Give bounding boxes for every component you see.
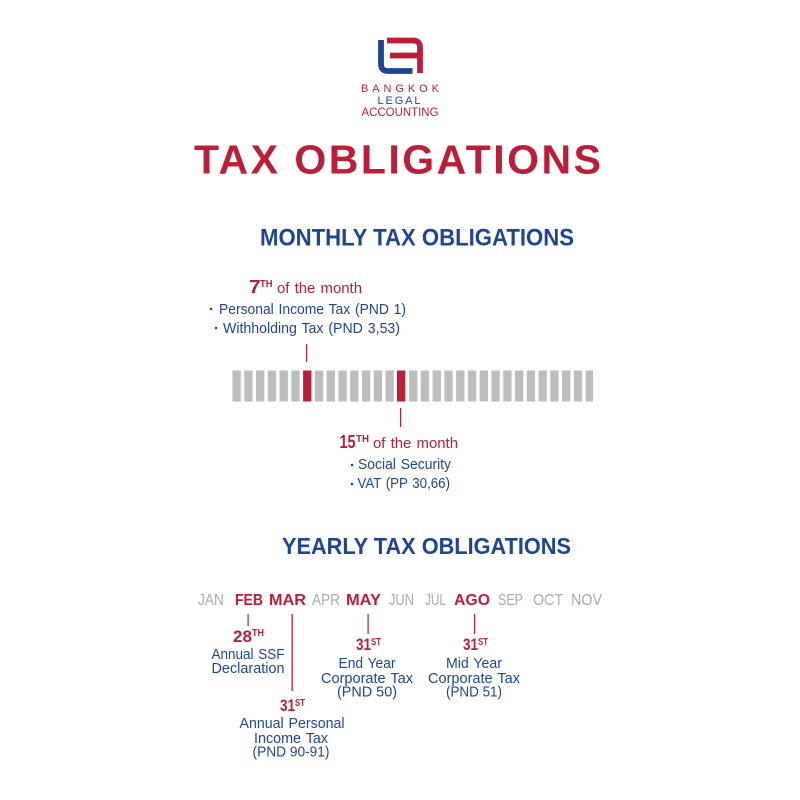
deadline: August 31 bbox=[428, 614, 521, 700]
description: Income Tax bbox=[254, 731, 329, 747]
description: Annual SSF bbox=[212, 647, 285, 663]
description: Corporate Tax bbox=[428, 671, 521, 687]
date label: of the month bbox=[373, 436, 458, 452]
callout: 7th of the month bbox=[210, 277, 406, 362]
heading: monthly tax obligations: MONTHLY TAX OBLIGATIONS bbox=[260, 224, 574, 252]
date: 31 bbox=[463, 635, 478, 654]
deadline: February 28 bbox=[212, 614, 285, 677]
month axis: AGO bbox=[454, 592, 490, 609]
month axis: JAN bbox=[198, 592, 224, 609]
month axis: SEP bbox=[498, 592, 523, 609]
date: ST bbox=[371, 637, 381, 648]
connector line bbox=[292, 614, 293, 691]
connector line bbox=[306, 344, 307, 362]
connector line bbox=[400, 408, 401, 427]
logo bbox=[361, 40, 440, 119]
month axis: JUL bbox=[425, 592, 446, 609]
date: 31 bbox=[356, 635, 371, 654]
tax list: Personal Income Tax (PND 1) bbox=[219, 302, 406, 318]
title: TAX OBLIGATIONS bbox=[194, 136, 601, 182]
description: Annual Personal bbox=[240, 716, 344, 732]
description: (PND 51) bbox=[446, 684, 502, 700]
callout: 15th of the month bbox=[340, 408, 458, 492]
description: End Year bbox=[338, 656, 396, 672]
logo text bbox=[361, 83, 440, 119]
month axis: MAY bbox=[346, 592, 381, 609]
month axis: FEB bbox=[235, 592, 263, 609]
month axis: OCT bbox=[533, 592, 563, 609]
month axis: NOV bbox=[571, 592, 602, 609]
description: (PND 90-91) bbox=[252, 744, 330, 760]
logo text: ACCOUNTING bbox=[362, 107, 439, 119]
date label: TH bbox=[260, 279, 272, 290]
connector line bbox=[248, 614, 249, 626]
description: Mid Year bbox=[446, 656, 502, 672]
logo text: BANGKOK bbox=[361, 83, 440, 95]
date label: 7 bbox=[249, 277, 260, 297]
date label: 15 bbox=[340, 432, 356, 452]
calendar strip: days of the month bbox=[232, 370, 593, 402]
description: Declaration bbox=[212, 661, 284, 677]
date bbox=[233, 627, 264, 646]
tax list bbox=[210, 302, 406, 337]
connector line bbox=[368, 614, 369, 634]
month axis bbox=[198, 592, 602, 609]
date: 31 bbox=[280, 696, 295, 715]
description bbox=[240, 716, 344, 760]
tax list bbox=[351, 457, 452, 492]
date label bbox=[249, 277, 362, 297]
tax list: Social Security bbox=[358, 457, 452, 473]
month axis: JUN bbox=[389, 592, 414, 609]
date label bbox=[340, 432, 458, 452]
tax list: VAT (PP 30,66) bbox=[358, 476, 450, 492]
date: ST bbox=[478, 637, 488, 648]
icon: logo mark bbox=[381, 40, 420, 73]
description bbox=[212, 647, 285, 677]
month axis: APR bbox=[312, 592, 340, 609]
date: TH bbox=[252, 628, 264, 639]
tax list: Withholding Tax (PND 3,53) bbox=[223, 321, 400, 337]
logo text: LEGAL bbox=[378, 95, 420, 107]
description: (PND 50) bbox=[337, 684, 397, 700]
date: 28 bbox=[233, 627, 252, 646]
deadline: March 31 bbox=[240, 614, 344, 760]
connector line bbox=[474, 614, 475, 634]
date label: TH bbox=[356, 434, 369, 445]
description bbox=[321, 656, 414, 700]
date label: of the month bbox=[277, 281, 362, 297]
month axis: MAR bbox=[269, 592, 306, 609]
heading: yearly tax obligations: YEARLY TAX OBLIGATIONS bbox=[282, 533, 571, 559]
description bbox=[428, 656, 521, 700]
deadline: May 31 bbox=[321, 614, 414, 700]
date: ST bbox=[295, 698, 305, 709]
description: Corporate Tax bbox=[321, 671, 414, 687]
